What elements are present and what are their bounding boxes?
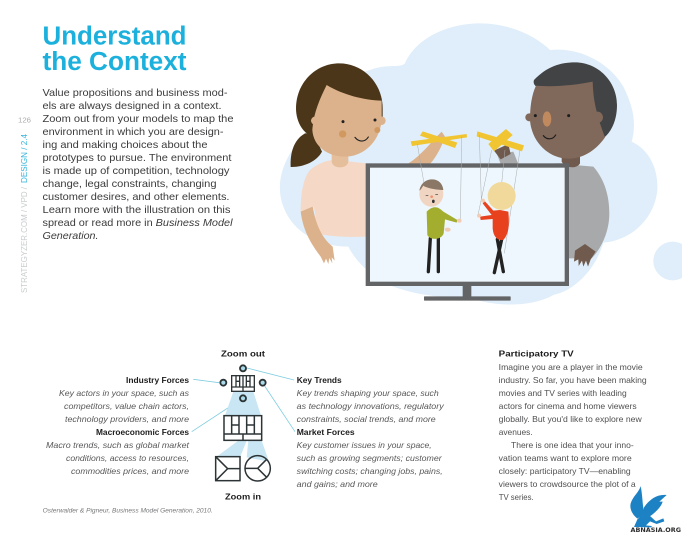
puppet strings — [417, 135, 520, 253]
intro paragraph: change, legal constraints, changing — [42, 179, 217, 190]
intro paragraph: Learn more with the illustration on this — [42, 205, 230, 216]
connector lines — [192, 368, 295, 432]
right forces text — [297, 375, 445, 489]
intro paragraph: Zoom out from your models to map the — [42, 114, 234, 125]
zoom in label: Zoom in — [225, 492, 261, 502]
participatory tv column: Imagine you are a player in the movie — [499, 362, 643, 372]
vertical section label: DESIGN / 2.4 — [20, 133, 29, 183]
participatory tv column: industry. So far, you have been making — [499, 375, 647, 385]
cloud background — [280, 23, 657, 305]
puppet: red shirt — [477, 182, 516, 273]
participatory tv column: avenues. — [499, 427, 533, 437]
intro paragraph — [42, 88, 234, 242]
woman — [291, 63, 445, 264]
right forces text: Key trends shaping your space, such — [297, 388, 439, 398]
participatory tv column: movies and TV series with leading — [499, 388, 627, 398]
right forces text: Key customer issues in your space, — [297, 440, 432, 450]
intro paragraph: ing and making choices about the — [42, 140, 208, 151]
source note: Osterwalder & Pigneur, Business Model Generation, 2010. — [43, 508, 213, 514]
intro paragraph: els are always designed in a context. — [42, 101, 222, 112]
right forces text: and gains; and more — [297, 479, 378, 489]
participatory tv column: globally. But you'd like to explore new — [499, 414, 643, 424]
intro paragraph: is made up of competition, technology — [42, 166, 230, 177]
markers — [220, 365, 266, 401]
participatory tv column: TV series. — [499, 492, 534, 502]
watermark logo — [630, 486, 681, 534]
right forces text: Key Trends — [297, 375, 342, 385]
left forces text: competitors, value chain actors, — [64, 401, 189, 411]
value proposition icon — [216, 457, 240, 481]
participatory tv column — [499, 348, 647, 502]
puppet: green shirt — [419, 179, 462, 272]
participatory tv column: vation teams want to explore more — [499, 453, 632, 463]
participatory tv column: Participatory TV — [499, 348, 574, 358]
zoom diagram — [192, 365, 295, 481]
right forces text: switching costs; changing jobs, pains, — [297, 466, 443, 476]
vertical section label — [20, 133, 29, 293]
page number: 126 — [18, 116, 31, 124]
title — [42, 22, 187, 76]
left forces text: conditions, access to resources, — [66, 453, 189, 463]
title: the Context — [42, 48, 187, 76]
zoom out label: Zoom out — [221, 348, 265, 358]
television — [366, 163, 569, 301]
participatory tv column: actors for cinema and home viewers — [499, 401, 637, 411]
right forces text: Market Forces — [297, 427, 355, 437]
vertical section label: STRATEGYZER.COM / VPD / — [20, 186, 29, 293]
intro paragraph: customer desires, and other elements. — [42, 192, 230, 203]
left forces text: technology providers, and more — [65, 414, 189, 424]
right forces text: constraints, social trends, and more — [297, 414, 436, 424]
right forces text: such as growing segments; customer — [297, 453, 443, 463]
participatory tv column: closely: participatory TV—enabling — [499, 466, 631, 476]
watermark logo: ABNASIA.ORG — [630, 526, 681, 534]
intro paragraph: spread or read more in Business Model — [42, 218, 233, 229]
intro paragraph: environment in which you are design- — [42, 127, 224, 138]
title: Understand — [42, 22, 186, 50]
participatory tv column: viewers to crowdsource the plot of a — [499, 479, 636, 489]
left forces text: Macro trends, such as global market — [46, 440, 190, 450]
man — [494, 62, 617, 267]
intro paragraph: prototypes to pursue. The environment — [42, 153, 232, 164]
intro paragraph: Value propositions and business mod- — [42, 88, 228, 99]
customer profile icon — [245, 456, 270, 481]
illustration: puppeteers and TV — [280, 23, 682, 305]
left forces text: Industry Forces — [126, 375, 189, 385]
intro paragraph: Generation. — [42, 231, 98, 242]
right forces text: as technology innovations, regulatory — [297, 401, 445, 411]
small canvas icon — [232, 376, 254, 391]
left forces text: commodities prices, and more — [71, 466, 189, 476]
left forces text: Key actors in your space, such as — [59, 388, 190, 398]
participatory tv column: There is one idea that your inno- — [511, 440, 634, 450]
large canvas icon — [224, 416, 262, 440]
left forces text — [46, 375, 190, 476]
puppet control crosses — [411, 129, 524, 151]
small cloud circle — [653, 242, 682, 280]
left forces text: Macroeconomic Forces — [96, 427, 189, 437]
zoom beams — [216, 392, 269, 462]
